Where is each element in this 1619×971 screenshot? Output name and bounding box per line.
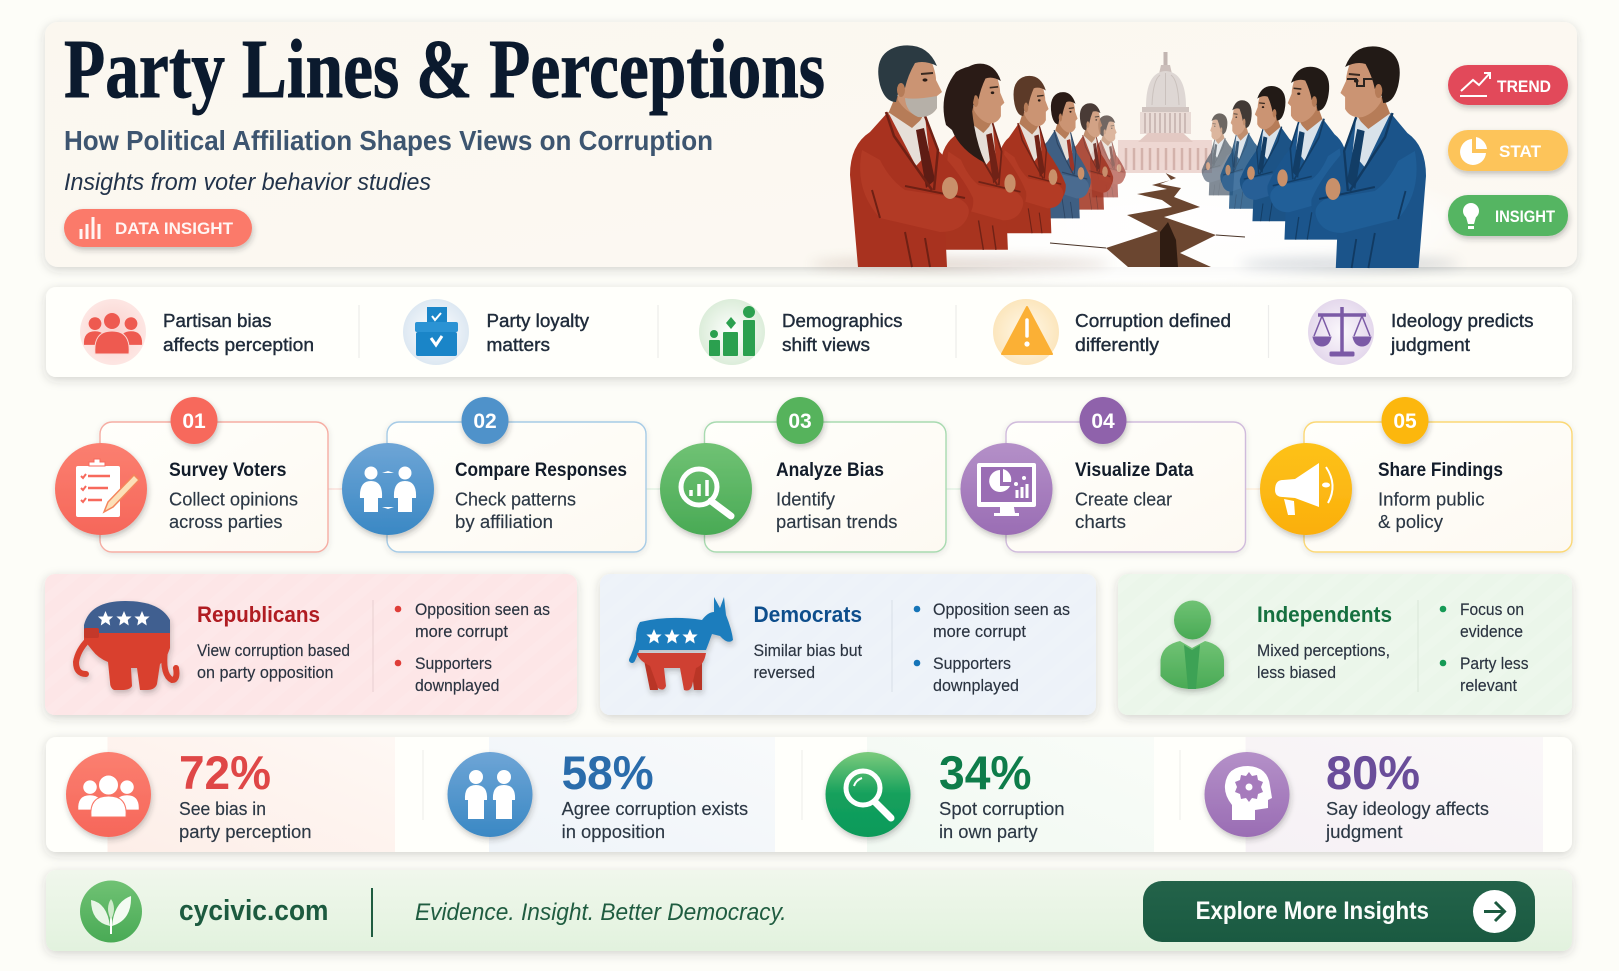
step 3: analyze bias (660, 397, 962, 552)
badge 01 (170, 397, 218, 444)
icon: clipboard (55, 443, 147, 535)
panel: republicans: Republicans (197, 602, 320, 627)
stat: 80%: Say ideology affects (1326, 799, 1489, 819)
step 4: visualize data: charts (1075, 512, 1126, 532)
badge 04 (1080, 397, 1126, 444)
step 2: compare responses (342, 397, 662, 552)
grey beard (905, 96, 937, 117)
panel: independents: Party less (1460, 654, 1528, 673)
tag: trend: TREND (1497, 77, 1551, 96)
stat: 80% (1204, 746, 1489, 842)
item: ideology predicts (1308, 299, 1534, 365)
step 2: compare responses: by affiliation (455, 512, 553, 532)
step 1: survey voters (55, 397, 344, 552)
item: partisan bias (80, 299, 314, 365)
item: party loyalty (403, 299, 589, 365)
item: demographics: shift views (782, 335, 870, 355)
panel: footer: Evidence. Insight. Better Democracy. (415, 899, 787, 926)
panel: independents: relevant (1460, 676, 1517, 695)
item: partisan bias: affects perception (163, 335, 314, 355)
panel: independents: Independents (1257, 602, 1392, 627)
step 5: share findings: Share Findings (1378, 460, 1503, 481)
tag: insight (1448, 195, 1568, 236)
item: ideology predicts: judgment (1390, 335, 1470, 355)
panel: republicans: Supporters (415, 654, 492, 673)
panel: democrats: Similar bias but (754, 641, 862, 660)
panel: democrats: Supporters (933, 654, 1011, 673)
stat: 34%: Spot corruption (939, 799, 1065, 819)
button: explore more insights: Explore More Insights (1196, 897, 1429, 925)
panel: democrats: Opposition seen as (933, 600, 1070, 619)
panel: hero header (45, 22, 1577, 295)
blue party line of figures (1202, 46, 1426, 268)
badge 02 (462, 397, 508, 444)
step 3: analyze bias: partisan trends (776, 512, 898, 532)
stat: 34% (826, 746, 1065, 842)
badge 03: 03 (788, 410, 812, 433)
panel: republicans (45, 574, 577, 715)
step 1: survey voters: across parties (169, 512, 282, 532)
panel: key takeaways strip (46, 287, 1572, 377)
step 1: survey voters: Survey Voters (169, 460, 286, 481)
item: ideology predicts: Ideology predicts (1391, 311, 1534, 331)
panel: republicans: Opposition seen as (415, 600, 550, 619)
tagline: Insights from voter behavior studies (64, 169, 431, 196)
panel: footer (46, 870, 1572, 951)
panel: footer: cycivic.com (179, 895, 328, 927)
icon: elephant (76, 601, 176, 690)
item: demographics: Demographics (782, 311, 902, 331)
step 1: survey voters: Collect opinions (169, 490, 298, 510)
stat: 80%: 80% (1326, 746, 1420, 799)
ground crack (1050, 173, 1245, 267)
title: Party Lines & Perceptions (64, 23, 825, 116)
stat: 58% (448, 746, 748, 842)
item: demographics (699, 299, 902, 365)
panel: democrats: Democrats (754, 602, 862, 627)
step 3: analyze bias: Identify (776, 490, 835, 510)
panel: independents: less biased (1257, 663, 1336, 682)
soft shadow under figures (810, 257, 1110, 271)
step 3: analyze bias: Analyze Bias (776, 460, 884, 481)
step 2: compare responses: Check patterns (455, 490, 576, 510)
tag: stat: STAT (1499, 142, 1542, 161)
item: party loyalty: Party loyalty (486, 311, 589, 331)
tag: trend (1448, 65, 1568, 105)
stat: 34%: 34% (939, 746, 1032, 799)
panel: democrats (600, 574, 1096, 715)
subtitle: How Political Affiliation Shapes Views on Corruption (64, 125, 713, 156)
item: corruption defined (993, 299, 1231, 365)
button: explore more insights (1143, 881, 1535, 942)
badge 01: 01 (182, 410, 206, 433)
item: corruption defined: differently (1075, 335, 1159, 355)
soft shadow under blue figures (1240, 257, 1460, 271)
icon: megaphone (1260, 443, 1352, 535)
panel: independents: Focus on (1460, 600, 1524, 619)
red party line of figures (850, 45, 1126, 267)
panel: republicans: more corrupt (415, 622, 508, 641)
panel: republicans: View corruption based (197, 641, 350, 660)
badge: data insight: DATA INSIGHT (115, 219, 234, 238)
step 4: visualize data: Create clear (1075, 490, 1172, 510)
long hair of second figure (944, 66, 993, 163)
icon: two people comparing (342, 443, 434, 535)
stat: 80%: judgment (1325, 822, 1403, 842)
step 2: compare responses: Compare Responses (455, 460, 627, 481)
badge 03 (776, 397, 824, 444)
panel: republicans: on party opposition (197, 663, 334, 682)
step 5: share findings (1260, 397, 1572, 552)
icon: donkey (632, 597, 733, 690)
badge 05 (1382, 397, 1428, 444)
step 4: visualize data: Visualize Data (1075, 460, 1194, 481)
badge 02: 02 (473, 410, 497, 433)
stat: 72%: See bias in (179, 799, 266, 819)
stat: 58%: 58% (562, 746, 654, 799)
panel: independents: Mixed perceptions, (1257, 641, 1390, 660)
stat: 72%: party perception (179, 822, 312, 842)
stat: 72% (66, 746, 312, 842)
panel: independents: evidence (1460, 622, 1523, 641)
badge 04: 04 (1091, 410, 1115, 433)
badge: data insight (64, 209, 252, 247)
stat: 58%: Agree corruption exists (562, 799, 748, 819)
stat: 34%: in own party (939, 822, 1038, 842)
step 5: share findings: Inform public (1378, 490, 1484, 510)
badge 05: 05 (1393, 410, 1417, 433)
panel: democrats: reversed (754, 663, 815, 682)
panel: republicans: downplayed (415, 676, 500, 695)
step 5: share findings: & policy (1378, 512, 1443, 532)
illustration: divided voters and capitol (810, 45, 1485, 295)
panel: statistics (46, 737, 1572, 852)
item: party loyalty: matters (486, 335, 550, 355)
panel: independents (1118, 574, 1572, 715)
icon: person (1160, 600, 1224, 689)
tag: insight: INSIGHT (1495, 207, 1556, 226)
glasses (1347, 79, 1373, 86)
panel: democrats: downplayed (933, 676, 1019, 695)
stat: 58%: in opposition (562, 822, 665, 842)
capitol building (1118, 52, 1212, 173)
item: partisan bias: Partisan bias (163, 311, 272, 331)
stat: 72%: 72% (179, 746, 271, 799)
icon: monitor with charts (960, 443, 1052, 535)
icon: leaf logo (80, 880, 142, 942)
icon: magnifier (660, 443, 752, 535)
panel: democrats: more corrupt (933, 622, 1026, 641)
step 4: visualize data (960, 397, 1261, 552)
item: corruption defined: Corruption defined (1075, 311, 1231, 331)
tag: stat (1448, 130, 1568, 171)
